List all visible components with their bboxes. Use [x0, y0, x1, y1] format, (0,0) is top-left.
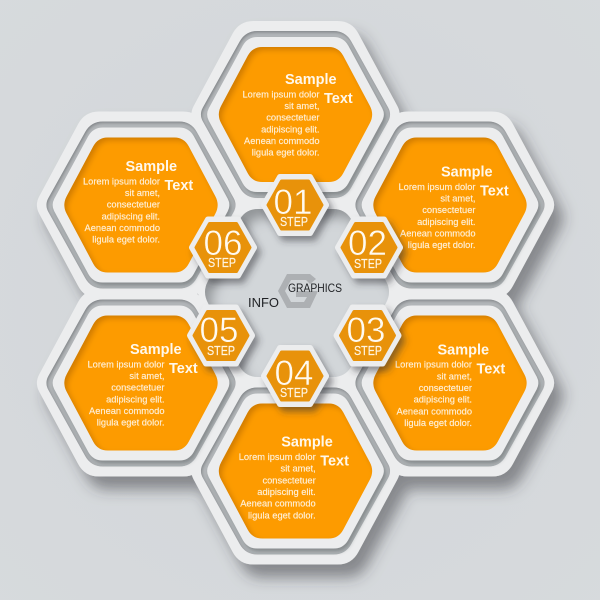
text: sample 3: sit amet,	[437, 371, 472, 381]
outer hexagon frame	[37, 21, 554, 564]
text: sample 3: consectetuer	[419, 383, 472, 393]
center opening	[205, 209, 389, 377]
badge: step 04: 04	[275, 354, 313, 393]
text: sample 4: Lorem ipsum dolor	[239, 452, 316, 462]
text: sample 2: consectetuer	[422, 205, 476, 215]
text: sample 2: sit amet,	[440, 194, 476, 204]
badge: step 03: 03	[347, 311, 385, 350]
text: sample 4: Sample	[281, 435, 333, 451]
panel: sample 6	[46, 122, 236, 288]
text: sample 3: Lorem ipsum dolor	[395, 360, 472, 370]
badge: step 03	[336, 308, 398, 364]
panel: sample 5	[46, 300, 236, 466]
badge: step 01	[264, 177, 326, 233]
panel: sample 4	[201, 388, 390, 554]
text: sample 6: adipiscing elit.	[102, 211, 160, 221]
text: sample 5: Text	[169, 361, 198, 377]
text: sample 5: Sample	[130, 342, 182, 358]
text: sample 1: sit amet,	[284, 101, 320, 111]
icon: hexagon G	[278, 274, 318, 308]
text: sample 3: Text	[476, 361, 505, 377]
text: sample 6: ligula eget dolor.	[92, 235, 160, 245]
text: sample 6: Sample	[126, 159, 177, 175]
text: sample 2: Aenean commodo	[400, 228, 476, 238]
badge: step 06: 06	[204, 224, 242, 263]
text: sample 6: sit amet,	[125, 188, 160, 198]
badge: step 05	[190, 308, 252, 364]
badge: step 06	[192, 220, 254, 276]
center logo	[248, 274, 342, 310]
badge: step 01: 01	[274, 183, 312, 222]
text: sample 3: adipiscing elit.	[414, 395, 472, 405]
panel: sample 1	[201, 31, 390, 198]
text: sample 2	[398, 164, 509, 250]
text: sample 2: ligula eget dolor.	[408, 240, 476, 250]
text: sample 2: Lorem ipsum dolor	[398, 182, 476, 192]
badge: step 05: 05	[200, 311, 238, 350]
text: sample 5: ligula eget dolor.	[97, 418, 164, 428]
text: sample 1: Sample	[285, 72, 337, 88]
badge: step 01: STEP	[280, 214, 308, 229]
text: sample 5: sit amet,	[129, 371, 164, 381]
text: sample 3: Sample	[438, 342, 489, 358]
text: sample 5	[88, 342, 198, 428]
badge: step 02	[338, 220, 400, 276]
label: graphics: GRAPHICS	[288, 281, 342, 295]
panel: sample 2	[355, 122, 545, 288]
text: sample 1: Aenean commodo	[244, 136, 320, 146]
badge: step 04: STEP	[280, 385, 308, 400]
text: sample 2: Text	[480, 184, 509, 200]
label: info: INFO	[248, 295, 279, 310]
badge: step 02: STEP	[354, 256, 382, 271]
badge: step 03: STEP	[354, 343, 382, 358]
badge: step 04	[264, 348, 326, 404]
text: sample 4: ligula eget dolor.	[248, 510, 316, 520]
text: sample 1	[242, 72, 353, 158]
badge: step 06: STEP	[208, 255, 236, 270]
text: sample 5: adipiscing elit.	[106, 394, 164, 404]
text: sample 2: adipiscing elit.	[417, 217, 476, 227]
text: sample 5: Lorem ipsum dolor	[88, 359, 164, 369]
text: sample 5: Aenean commodo	[89, 406, 164, 416]
text: sample 3	[395, 342, 505, 428]
text: sample 3: Aenean commodo	[397, 406, 472, 416]
text: sample 5: consectetuer	[111, 383, 164, 393]
text: sample 1: Lorem ipsum dolor	[242, 89, 320, 99]
text: sample 1: consectetuer	[266, 113, 320, 123]
panel: sample 3	[355, 300, 545, 466]
badge: step 05: STEP	[207, 343, 235, 358]
text: sample 4: consectetuer	[262, 475, 316, 485]
text: sample 4: Text	[320, 454, 349, 470]
text: sample 4: Aenean commodo	[240, 499, 316, 509]
text: sample 6: Aenean commodo	[85, 223, 160, 233]
text: sample 6: Text	[164, 178, 193, 194]
text: sample 3: ligula eget dolor.	[404, 418, 472, 428]
text: sample 6: consectetuer	[107, 200, 160, 210]
text: sample 2: Sample	[441, 164, 493, 180]
text: sample 6: Lorem ipsum dolor	[83, 176, 160, 186]
text: sample 6	[83, 159, 193, 245]
text: sample 1: Text	[324, 91, 353, 107]
text: sample 4: sit amet,	[281, 464, 316, 474]
badge: step 02: 02	[348, 224, 387, 263]
text: sample 1: adipiscing elit.	[261, 124, 320, 134]
text: sample 1: ligula eget dolor.	[252, 148, 320, 158]
text: sample 4	[239, 435, 349, 520]
text: sample 4: adipiscing elit.	[257, 487, 316, 497]
